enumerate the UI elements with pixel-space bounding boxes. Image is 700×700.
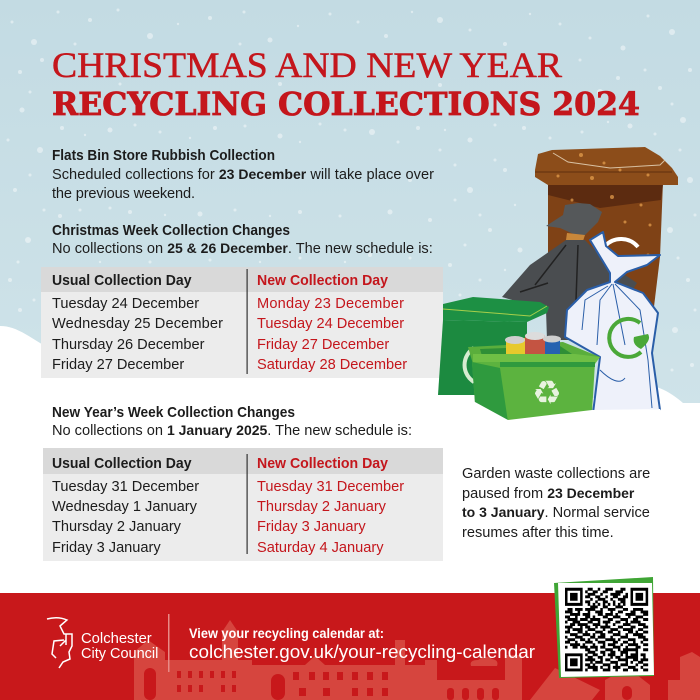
illustration: brown bin <box>535 147 678 315</box>
text block: garden waste: resumes after this time. <box>462 525 614 541</box>
table: christmas week schedule: New Collection Day <box>257 273 389 289</box>
snow mound under bins <box>438 395 668 428</box>
QR code modules <box>565 589 648 670</box>
table: new year's week schedule <box>43 448 443 561</box>
logo: Colchester City Council: Colchester <box>81 631 152 647</box>
call to action <box>189 626 535 662</box>
illustration: black bag <box>502 203 637 340</box>
QR code panel <box>554 577 654 678</box>
table: christmas week schedule <box>41 267 443 378</box>
table: christmas week schedule: Thursday 26 December <box>52 337 205 353</box>
illustration: green food bin <box>438 297 549 395</box>
footer divider <box>168 614 170 672</box>
text block: flats bin store: Flats Bin Store Rubbish Collection <box>52 148 275 164</box>
table: new year's week schedule: Tuesday 31 December <box>52 479 199 495</box>
table: new year's week schedule: Saturday 4 January <box>257 540 384 556</box>
text block: flats bin store <box>52 148 434 202</box>
snow hill <box>0 326 700 600</box>
table: new year's week schedule: New Collection Day <box>257 456 389 472</box>
title: RECYCLING COLLECTIONS 2024 <box>52 86 640 123</box>
call to action: View your recycling calendar at: <box>189 626 384 641</box>
text block: garden waste: paused from 23 December <box>462 485 635 502</box>
footer skyline <box>134 620 700 700</box>
text block: garden waste <box>462 466 650 541</box>
snowy sky background <box>0 0 700 410</box>
text block: garden waste: Garden waste collections are <box>462 466 650 482</box>
table: christmas week schedule: Monday 23 December <box>257 296 404 312</box>
table: christmas week schedule: Tuesday 24 December <box>52 296 199 312</box>
table: christmas week schedule: Saturday 28 December <box>257 357 407 373</box>
text block: christmas week changes <box>52 223 433 257</box>
title: CHRISTMAS AND NEW YEAR <box>52 45 562 85</box>
text block: christmas week changes: Christmas Week Collection Changes <box>52 223 290 239</box>
text block: flats bin store: Scheduled collections for 23 December will take place over <box>52 166 434 183</box>
text block: new year's week changes: New Year’s Week Collection Changes <box>52 405 295 421</box>
table: christmas week schedule: Friday 27 December <box>52 357 184 373</box>
title <box>52 45 640 123</box>
table: new year's week schedule: Thursday 2 January <box>52 519 182 535</box>
table: new year's week schedule: Thursday 2 January <box>257 499 387 515</box>
table: christmas week schedule: Tuesday 24 December <box>257 316 404 332</box>
illustration: cans <box>505 332 561 356</box>
table: christmas week schedule: Wednesday 25 December <box>52 316 223 332</box>
table: christmas week schedule: Usual Collection Day <box>52 273 192 289</box>
text block: new year's week changes: No collections on 1 January 2025. The new schedule is: <box>52 422 412 439</box>
table: new year's week schedule: Friday 3 January <box>257 519 366 535</box>
text block: garden waste: to 3 January. Normal service <box>462 504 650 521</box>
text block: new year's week changes <box>52 405 412 439</box>
table: new year's week schedule: Friday 3 January <box>52 540 161 556</box>
illustration: green recycling box: ♻ <box>532 373 562 412</box>
logo: Colchester City Council <box>47 618 158 668</box>
illustration: white bag <box>565 232 660 413</box>
logo: Colchester City Council: City Council <box>81 646 158 662</box>
text block: flats bin store: the previous weekend. <box>52 186 195 202</box>
text block: christmas week changes: No collections on 25 & 26 December. The new schedule is: <box>52 240 433 257</box>
table: christmas week schedule: Friday 27 December <box>257 337 389 353</box>
table: new year's week schedule: Tuesday 31 December <box>257 479 404 495</box>
table: new year's week schedule: Wednesday 1 January <box>52 499 198 515</box>
call to action: colchester.gov.uk/your-recycling-calendar <box>189 641 535 662</box>
table: new year's week schedule: Usual Collection Day <box>52 456 192 472</box>
illustration: green recycling box <box>468 332 600 422</box>
footer band <box>0 593 700 700</box>
